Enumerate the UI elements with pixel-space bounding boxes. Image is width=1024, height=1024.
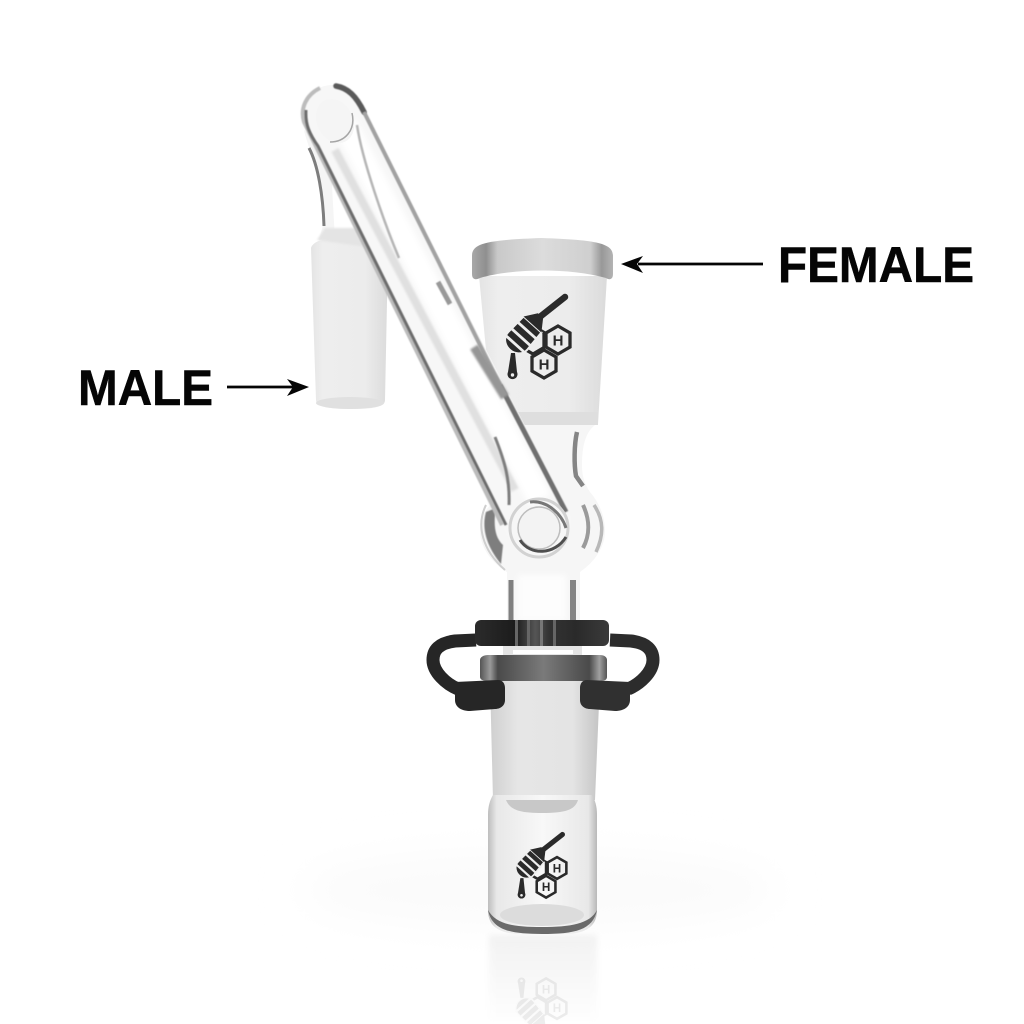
arrow: FEMALE [621,256,763,273]
arrow: MALE [227,379,309,396]
black clip [433,620,653,711]
male joint [311,228,388,409]
female logo [499,297,570,379]
upper neck and ball [480,425,605,622]
clip left block [455,680,505,711]
ball end ring [510,499,568,557]
clip collar [480,655,607,681]
floor shadow [300,850,780,930]
lower frosted joint [490,680,600,800]
glass connector to male joint [304,130,335,240]
female joint [472,238,613,427]
clip right block [580,680,630,711]
small glass between clip and collar [503,644,582,657]
label: MALE: MALE [78,360,213,416]
female rim [472,238,613,279]
diagonal glass tube [303,85,571,557]
reflection below jar [489,935,597,1024]
label: FEMALE: FEMALE [778,237,974,293]
clip handles [433,640,476,689]
jar logo [511,834,566,899]
clip top bar [475,620,609,646]
glass jar [488,795,597,934]
